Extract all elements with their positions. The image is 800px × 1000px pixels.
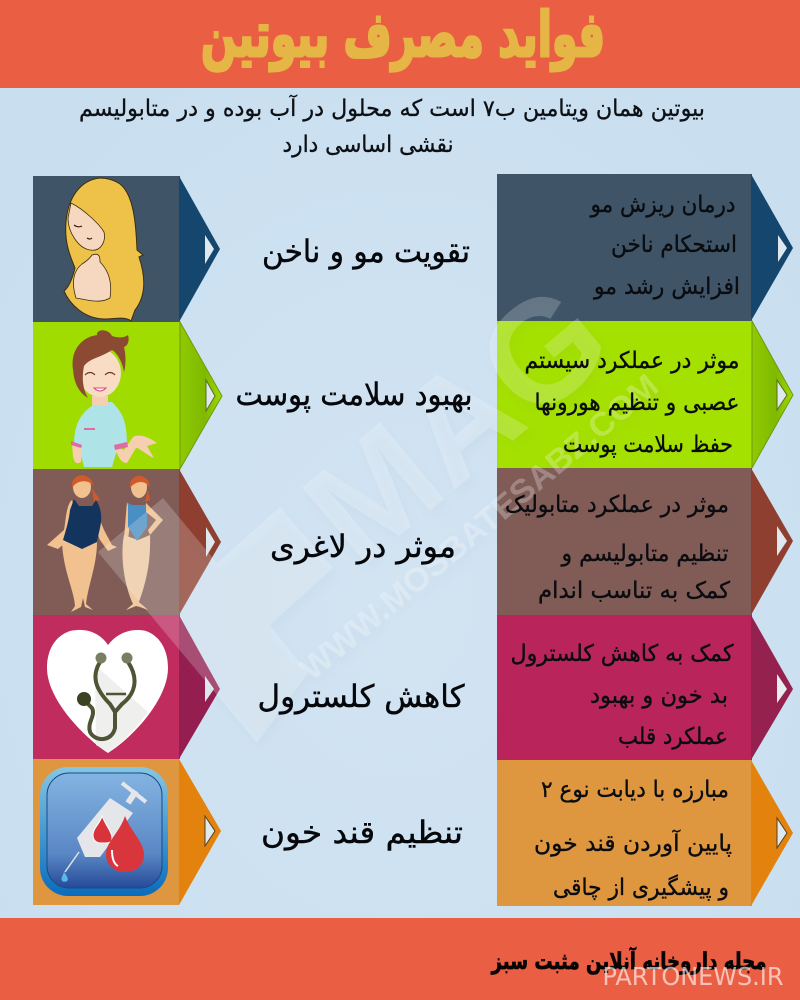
text: hair benefits: درمان ریزش مو [590,192,736,218]
text: slimming benefits [505,492,730,604]
panel: skin benefits [497,321,793,468]
intro text: بیوتین همان ویتامین ب۷ است که محلول در آب بوده و در متابولیسم [79,94,705,122]
text: slimming benefits: موثر در عملکرد متابولیک [505,492,729,518]
icon: before and after body figures [47,475,163,612]
right column panels [497,174,793,906]
site watermark: PARTONEWS.IR [602,962,784,991]
panel: blood sugar [33,759,221,905]
panel: blood sugar benefits [497,760,793,906]
text: skin benefits [524,348,740,458]
text: slimming benefits: تنظیم متابولیسم و [561,541,728,567]
panel: cholesterol benefits [497,615,793,760]
footer band [0,918,800,1000]
heading: effective for slimming: موثر در لاغری [270,529,456,565]
figure: overweight woman [47,475,117,612]
text: skin benefits: عصبی و تنظیم هورونها [534,390,740,416]
intro text: نقشی اساسی دارد [282,132,454,158]
heading: regulates blood sugar: تنظیم قند خون [261,815,463,851]
header band [0,0,800,88]
icon: app tile with syringe and blood drops [40,767,168,896]
syringe [61,783,146,882]
watermark: MAG [275,252,638,594]
text: hair benefits: استحکام ناخن [611,232,737,258]
heading: improve skin health: بهبود سلامت پوست [236,377,472,413]
icon: woman with long blond hair [64,178,144,321]
text: cholesterol benefits: بد خون و بهبود [590,683,728,709]
panel: cholesterol [33,615,220,759]
text: cholesterol benefits [510,641,734,750]
text: slimming benefits: کمک به تناسب اندام [538,578,730,604]
text: skin benefits: حفظ سلامت پوست [563,432,733,458]
heading: lowers cholesterol: کاهش کلسترول [258,679,465,715]
panel: slimming benefits [497,468,793,615]
heading: strengthen hair and nails: تقویت مو و ناخن [262,234,470,270]
text: cholesterol benefits: کمک به کاهش کلسترول [510,641,734,667]
blood drops [93,816,112,843]
left column panels [33,176,222,905]
panel: skin [33,322,222,469]
intro text [79,94,705,158]
icon: smiling woman in scrubs [71,330,157,467]
text: hair benefits: افزایش رشد مو [593,274,740,300]
panel: hair [33,176,220,322]
text: skin benefits: موثر در عملکرد سیستم [524,348,740,374]
text: blood sugar benefits: و پیشگیری از چاقی [553,874,729,901]
text: blood sugar benefits: مبارزه با دیابت نوع ۲ [541,777,729,803]
text: blood sugar benefits [534,777,732,901]
icon: heart with stethoscope [47,630,168,753]
figure: slim woman [122,476,163,610]
panel: slimming [33,469,221,615]
text: blood sugar benefits: پایین آوردن قند خون [534,829,732,857]
watermark: WWW.MOSBATESABZ.COM [293,367,665,687]
text: hair benefits [590,192,740,300]
text: cholesterol benefits: عملکرد قلب [618,724,728,750]
stethoscope [77,652,135,739]
watermark [98,252,665,743]
panel: hair benefits [497,174,793,321]
